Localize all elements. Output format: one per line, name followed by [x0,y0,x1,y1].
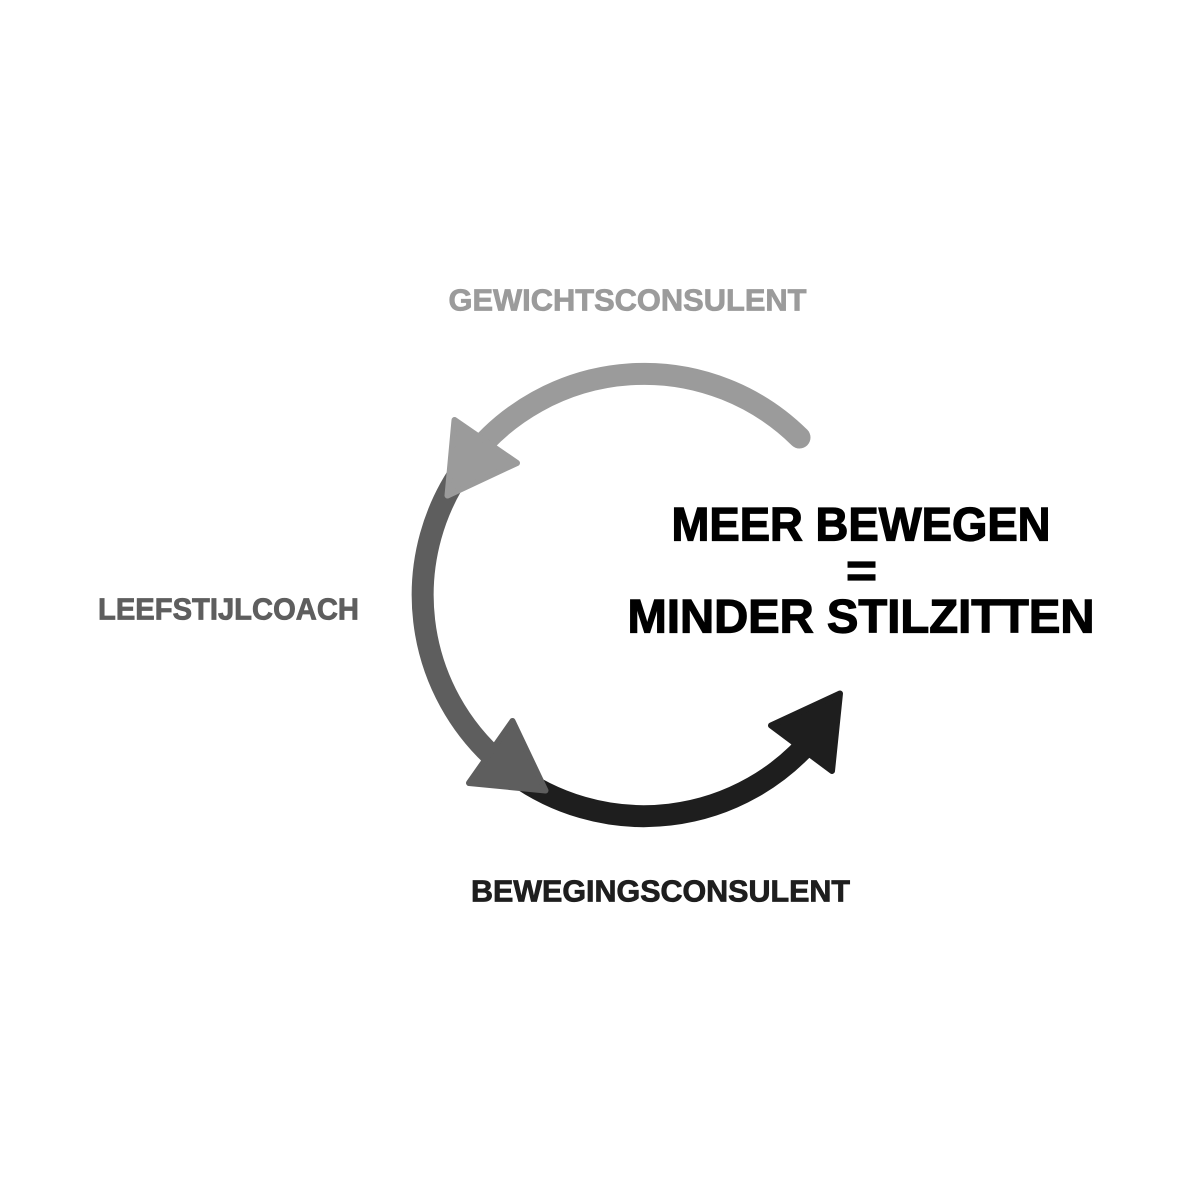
equals sign: = [846,544,877,596]
message line: minder stilzitten: MINDER STILZITTEN [628,590,1094,642]
arrow: leefstijlcoach (dark gray) [423,465,546,790]
arrow: gewichtsconsulent (light gray) [448,374,800,496]
arrow: bewegingsconsulent (black) [510,694,840,816]
central message [628,498,1094,642]
label: bewegingsconsulent: BEWEGINGSCONSULENT [471,874,850,908]
label: leefstijlcoach: LEEFSTIJLCOACH [98,592,359,626]
message line: meer bewegen: MEER BEWEGEN [672,498,1050,550]
label: gewichtsconsulent: GEWICHTSCONSULENT [448,282,807,318]
